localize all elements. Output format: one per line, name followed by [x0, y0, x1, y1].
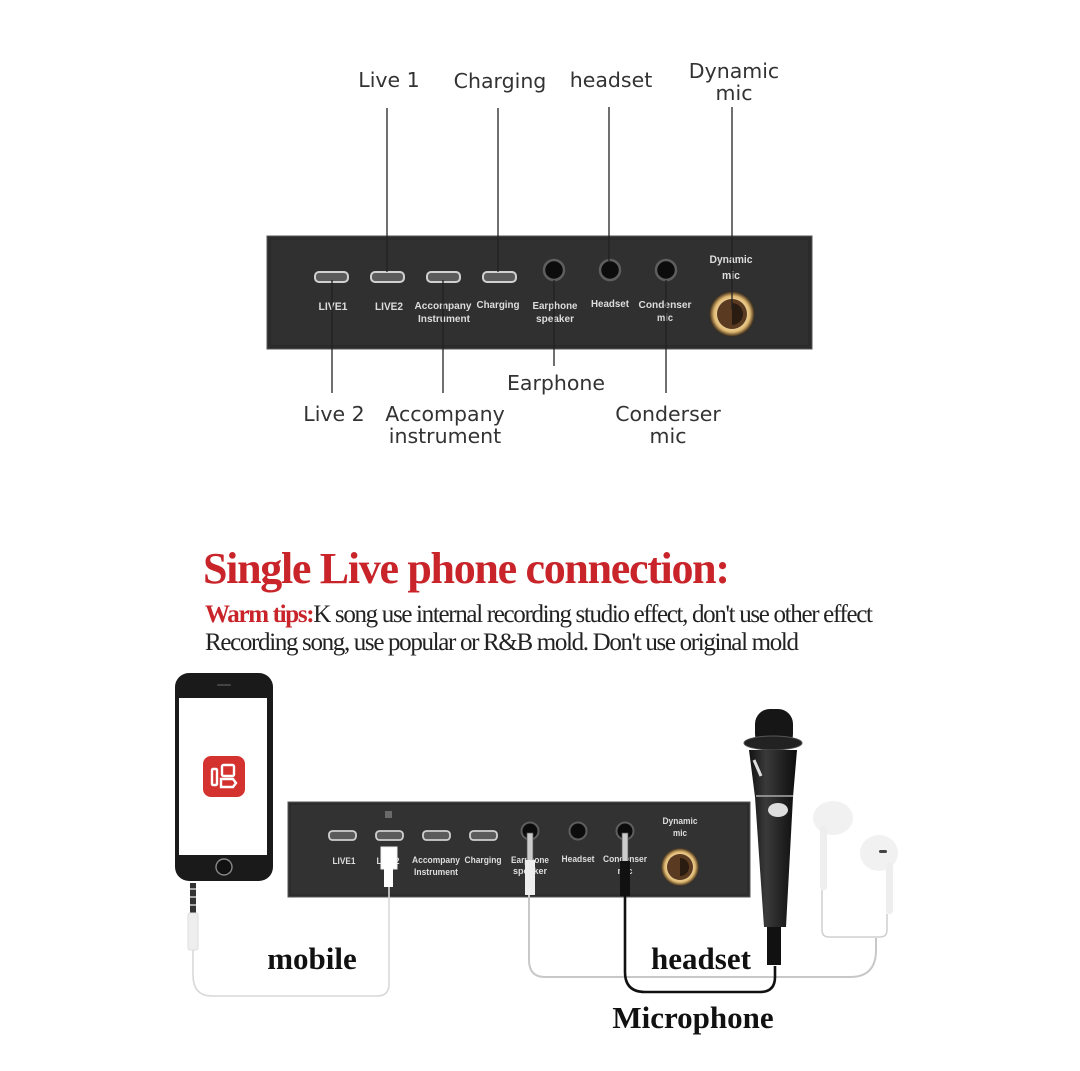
device port labels: Headset: [562, 854, 595, 865]
icon: earbuds: [813, 801, 898, 914]
device port labels: mic: [618, 866, 632, 877]
device port labels: Instrument: [414, 867, 459, 878]
icon: red app: [203, 756, 245, 797]
device port labels: Dynamic: [662, 816, 698, 827]
device port labels: LIVE2: [376, 856, 400, 867]
device port labels: mic: [673, 828, 687, 839]
callout labels: Accompany: [385, 402, 505, 426]
cable label: Microphone: Microphone: [612, 1000, 774, 1035]
cable: headset grey: [525, 833, 887, 977]
device port labels: LIVE1: [318, 301, 348, 313]
warm tips text: Recording song, use popular or R&B mold. Don't use original mold: [205, 629, 800, 656]
device port labels: speaker: [536, 313, 574, 325]
device port labels: [332, 816, 698, 878]
device port labels: [318, 254, 752, 325]
panel: bottom device connection view: [288, 802, 750, 897]
device port labels: Condenser: [638, 299, 692, 311]
port: dynamic mic jack: [661, 848, 699, 886]
panel: top device front view: [267, 236, 812, 349]
ports: audio jacks: [544, 260, 676, 280]
device port labels: LIVE1: [332, 856, 356, 867]
warm tips text: Warm tips:K song use internal recording studio effect, don't use other effect: [205, 601, 873, 628]
callout labels: Live 2: [303, 402, 365, 426]
callout labels: Live 1: [358, 68, 420, 92]
callout labels: Conderser: [615, 402, 721, 426]
callout labels: [303, 59, 779, 448]
heading: Single Live phone connection:: [203, 544, 730, 593]
warm tips text: [205, 601, 873, 656]
device port labels: Accompany: [414, 300, 472, 312]
icon: microphone: [744, 709, 802, 965]
callout labels: Dynamic: [689, 59, 779, 83]
cable label: mobile: mobile: [267, 941, 357, 976]
device port labels: Instrument: [418, 313, 470, 325]
callout lines: [332, 107, 732, 393]
device port labels: Earphone: [511, 855, 549, 866]
device port labels: mic: [657, 312, 673, 324]
device port labels: Charging: [476, 299, 520, 311]
ports: micro USB row: [315, 272, 516, 282]
icon: smartphone: [175, 673, 273, 881]
device port labels: Earphone: [532, 300, 578, 312]
cable: mobile white: [188, 847, 397, 996]
callout labels: Charging: [454, 69, 546, 93]
callout labels: Earphone: [507, 371, 605, 395]
port: dynamic mic jack: [710, 292, 754, 336]
device port labels: Dynamic: [710, 254, 752, 266]
device port labels: Condenser: [603, 854, 647, 865]
cable: microphone black: [620, 833, 775, 992]
ports: micro USB row: [329, 831, 497, 840]
callout labels: headset: [570, 68, 652, 92]
cable label: headset: headset: [651, 941, 752, 976]
callout labels: instrument: [389, 424, 501, 448]
ports: audio jacks: [522, 822, 634, 840]
small mark above LIVE2: [385, 811, 392, 818]
callout labels: mic: [716, 81, 752, 105]
device port labels: LIVE2: [375, 301, 403, 313]
callout labels: mic: [650, 424, 686, 448]
device port labels: Headset: [591, 298, 629, 310]
device port labels: Accompany: [412, 855, 461, 866]
device port labels: Charging: [464, 855, 502, 866]
device port labels: mic: [722, 270, 740, 282]
device port labels: speaker: [513, 866, 547, 877]
